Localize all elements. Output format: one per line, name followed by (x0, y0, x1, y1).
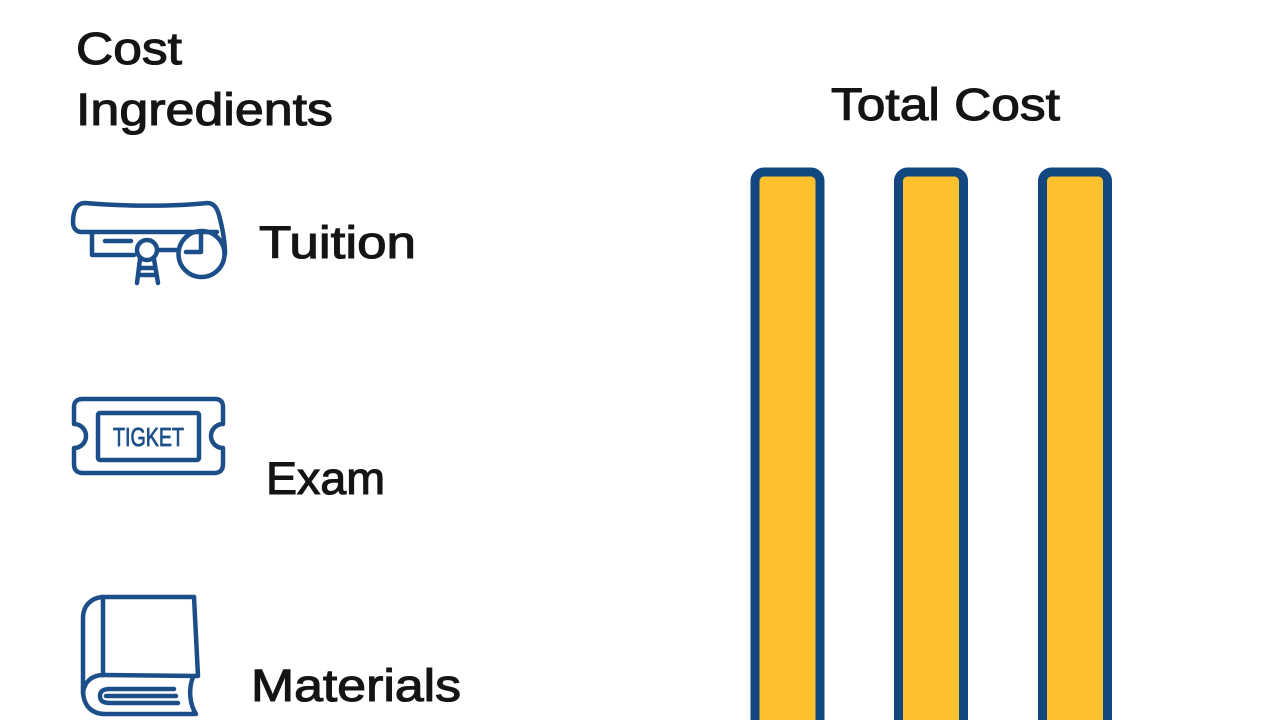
bar 1 (755, 172, 820, 720)
bar 2 (898, 172, 964, 720)
icon: book (83, 597, 198, 714)
label: Materials: Materials (251, 660, 461, 711)
heading: Cost Ingredients: Ingredients (76, 84, 333, 135)
label: Exam: Exam (266, 453, 385, 504)
label: Tuition: Tuition (259, 217, 416, 268)
heading: Total Cost: Total Cost (831, 79, 1060, 130)
bar 3 (1042, 172, 1108, 720)
heading: Cost Ingredients: Cost (76, 23, 182, 74)
icon: diploma scroll (73, 203, 225, 283)
icon: ticket (74, 399, 223, 473)
icon: ticket: TIGKET (113, 422, 184, 452)
bar chart: total cost bars (755, 172, 1108, 720)
heading: Cost Ingredients (76, 23, 333, 135)
